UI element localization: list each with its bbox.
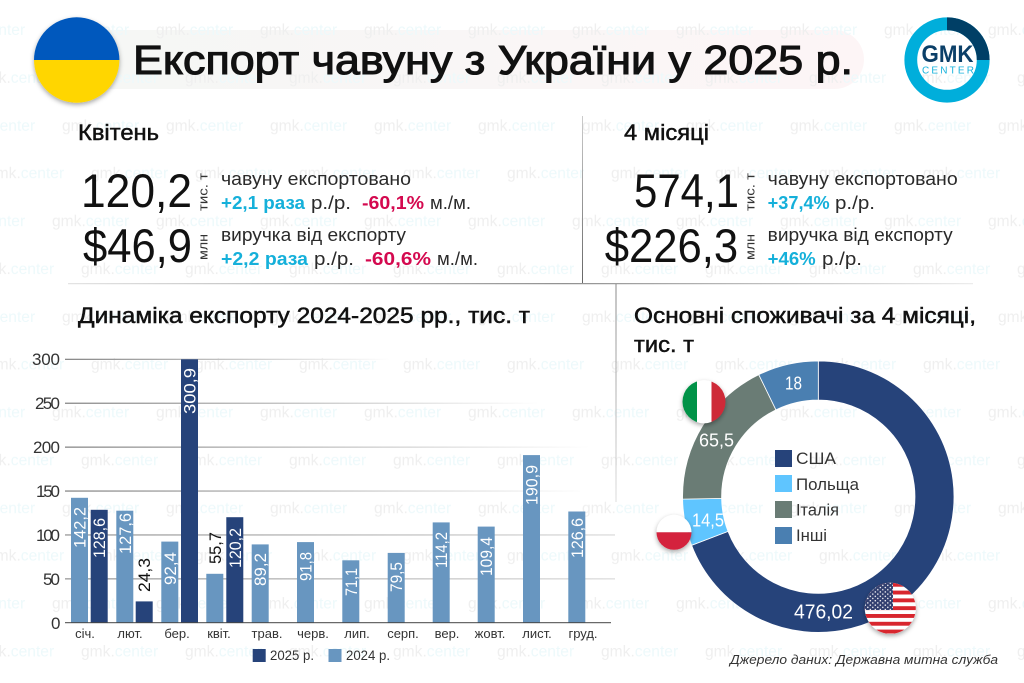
bar values	[72, 368, 587, 596]
donut values: 14,5	[692, 511, 724, 531]
y axis labels: 150	[36, 482, 60, 501]
donut values: 65,5	[699, 431, 734, 451]
bar values: 79,5	[388, 562, 406, 592]
stat: April volume: +2,1 раза	[221, 193, 306, 213]
heading: 4 months: 4 місяці	[624, 120, 709, 145]
stat: April revenue: виручка від експорту	[221, 225, 406, 245]
icon: Ukraine flag	[34, 17, 119, 103]
stat: April revenue	[83, 219, 478, 272]
stat: April revenue: +2,2 раза	[221, 249, 309, 269]
donut values: 18	[785, 374, 802, 394]
bar values: 114,2	[433, 532, 451, 568]
bar values: 92,4	[162, 552, 180, 585]
chart legend: 2024 р.	[346, 647, 390, 663]
divider: horizontal	[68, 283, 973, 284]
chart legend	[253, 647, 390, 663]
stat: 4 months volume: р./р.	[835, 193, 875, 213]
stat: April volume: р./р.	[311, 193, 351, 213]
icon: Poland flag	[656, 514, 692, 550]
stat: April volume: 120,2	[81, 164, 192, 217]
stat: April revenue: р./р.	[314, 249, 354, 269]
bar values: 24,3	[136, 558, 154, 592]
stat: 4 months revenue: +46%	[768, 249, 816, 269]
title pill background	[70, 30, 864, 89]
chart legend: 2025 р.	[270, 647, 314, 663]
stat: April volume: -60,1%	[362, 193, 424, 213]
y axis labels: 200	[33, 438, 60, 457]
donut values	[692, 374, 853, 624]
month labels: лип.	[344, 626, 370, 641]
bar values: 300,9	[182, 368, 200, 414]
donut legend: США	[796, 449, 837, 468]
month labels: квіт.	[207, 626, 231, 641]
donut values: 476,02	[794, 602, 853, 624]
heading: April: Квітень	[78, 120, 159, 145]
stat: 4 months revenue: $226,3	[605, 219, 738, 272]
bar values: 190,9	[524, 465, 542, 505]
y axis labels: 50	[43, 570, 60, 589]
icon: USA flag	[864, 582, 918, 636]
stat: April volume	[81, 164, 471, 217]
month labels: серп.	[387, 626, 419, 641]
stat: 4 months volume: +37,4%	[768, 193, 830, 213]
stat: April revenue: -60,6%	[365, 249, 431, 269]
stat: April volume: м./м.	[430, 193, 471, 213]
donut legend	[775, 449, 860, 545]
source note: Джерело даних: Державна митна служба	[728, 652, 998, 667]
logo: GMK Center	[911, 24, 983, 96]
month labels: груд.	[568, 626, 598, 641]
stat: 4 months revenue: р./р.	[822, 249, 862, 269]
heading: main consumers	[634, 303, 976, 357]
stat: April revenue: м./м.	[437, 249, 478, 269]
bar values: 71,1	[343, 568, 361, 596]
logo: GMK Center: CENTER	[922, 66, 974, 76]
y axis labels: 250	[35, 394, 60, 413]
month labels: бер.	[164, 626, 190, 641]
y axis labels	[32, 350, 60, 633]
stat: April volume: тис. т	[195, 173, 210, 211]
month labels: трав.	[252, 626, 282, 641]
stat: 4 months volume	[634, 164, 958, 217]
bar values: 127,6	[117, 513, 135, 554]
y axis labels: 0	[51, 614, 60, 633]
stat: 4 months volume: тис. т	[742, 173, 758, 211]
x axis	[65, 622, 611, 623]
stat: April volume: чавуну експортовано	[221, 169, 411, 189]
donut legend: Польща	[796, 475, 860, 494]
stat: April revenue: млн	[195, 234, 210, 260]
panel: 4 months stats	[605, 120, 958, 272]
donut chart: main consumers	[656, 361, 954, 636]
segment: Italy	[683, 375, 776, 499]
y axis labels: 300	[32, 350, 60, 369]
bars	[71, 359, 585, 623]
bar values: 128,6	[91, 518, 109, 558]
panel: April stats	[78, 120, 478, 272]
y axis labels: 100	[36, 526, 60, 545]
stat: 4 months volume: 574,1	[634, 164, 739, 217]
bar values: 91,8	[298, 552, 316, 581]
segment: others	[759, 361, 818, 410]
bar values: 120,2	[227, 528, 245, 568]
heading: main consumers: Основні споживачі за 4 місяці,	[634, 303, 976, 328]
bar chart: monthly export 2024-2025	[32, 350, 615, 663]
segment: USA	[692, 361, 954, 632]
icon: Italy flag	[682, 380, 726, 424]
divider: lower vertical	[616, 284, 617, 502]
month labels: жовт.	[475, 626, 505, 641]
logo: GMK Center: GMK	[922, 41, 974, 68]
donut legend: Інші	[796, 526, 827, 545]
month labels: лют.	[117, 626, 143, 641]
bar values: 142,2	[72, 507, 90, 548]
stat: 4 months revenue: виручка від експорту	[768, 225, 953, 245]
month labels: вер.	[435, 626, 459, 641]
stat: April revenue: $46,9	[83, 219, 192, 272]
stat: 4 months volume: чавуну експортовано	[768, 169, 958, 189]
month labels: січ.	[75, 626, 95, 641]
stat: 4 months revenue	[605, 219, 953, 272]
donut legend: Італія	[796, 501, 839, 520]
heading: main consumers: тис. т	[634, 332, 694, 357]
bar values: 109,4	[478, 537, 496, 576]
bar values: 126,6	[569, 518, 587, 558]
heading: export dynamics: Динаміка експорту 2024-2025 рр., тис. т	[78, 303, 530, 328]
month labels: черв.	[297, 626, 329, 641]
month labels: лист.	[522, 626, 552, 641]
title: Експорт чавуну з України у 2025 р.	[133, 37, 853, 83]
segment: Poland	[683, 498, 728, 545]
bar values: 55,7	[207, 532, 225, 564]
divider: upper vertical	[582, 116, 583, 283]
month labels	[75, 626, 598, 641]
bar values: 89,2	[252, 553, 270, 586]
stat: 4 months revenue: млн	[742, 234, 758, 260]
